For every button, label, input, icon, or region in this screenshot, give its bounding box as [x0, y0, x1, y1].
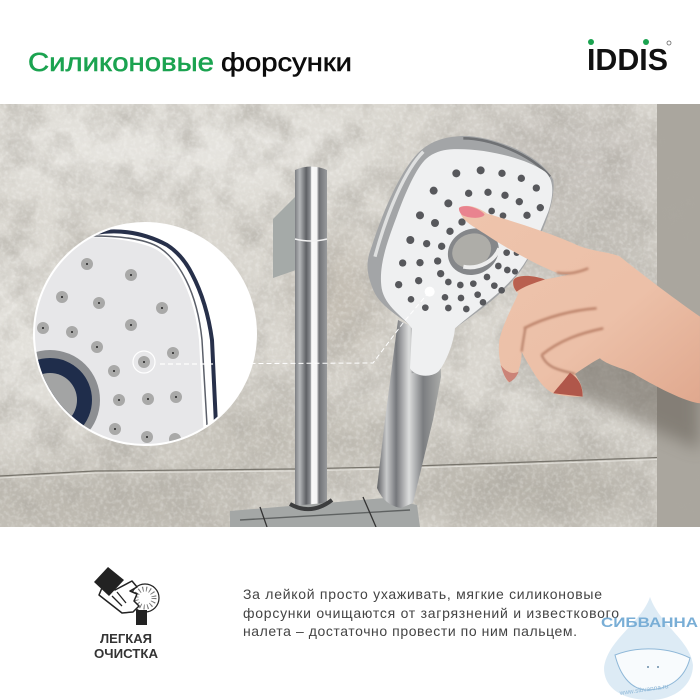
slider clamp [230, 497, 420, 527]
logo: IDDIS: IDDIS [587, 42, 668, 77]
fingernail: middle [513, 276, 545, 292]
chrome rim [367, 136, 554, 373]
white face [381, 149, 552, 376]
shower head [367, 136, 554, 376]
description text: форсунки очищаются от загрязнений и известкового [243, 605, 619, 621]
fingernail: ring [501, 365, 519, 382]
nozzles [395, 166, 544, 312]
stone wall [0, 104, 700, 540]
icon label: ЛЕГКАЯ [100, 631, 152, 646]
fingernail: little [553, 373, 583, 397]
hand [459, 206, 700, 403]
hand silhouette [459, 206, 700, 403]
watermark: Sibvanna [601, 597, 698, 700]
fingernail: index [459, 206, 485, 218]
icon label [94, 631, 159, 661]
lens base [33, 222, 257, 446]
highlighted nozzle ring [133, 351, 155, 373]
shower head icon [131, 584, 159, 612]
close-up nozzles [37, 258, 182, 445]
white marked nozzle [425, 287, 435, 297]
title: Силиконовые [28, 47, 214, 77]
button [448, 228, 499, 275]
title [28, 47, 352, 77]
chrome edge [95, 231, 216, 425]
panel: bathroom photo [0, 104, 700, 540]
description text: налета – достаточно провести по ним пальцем. [243, 623, 577, 639]
finger creases [524, 268, 603, 355]
hand shadow on wall [500, 330, 700, 450]
shower face close-up [35, 237, 204, 444]
title: форсунки [221, 47, 352, 77]
description text [243, 586, 619, 639]
hand icon [99, 581, 139, 613]
close-up button [36, 350, 100, 430]
cuff icon [94, 567, 124, 596]
description text: За лейкой просто ухаживать, мягкие силиконовые [243, 586, 602, 602]
icon label: ОЧИСТКА [94, 646, 159, 661]
icon: easy cleaning [94, 567, 159, 625]
dashed pointer line [253, 295, 426, 364]
magnifier circle [33, 222, 257, 446]
shower handle [377, 320, 441, 508]
watermark: Sibvanna: СИБВАННА [601, 615, 698, 630]
wall bracket [273, 196, 296, 278]
watermark: Sibvanna: www.sibvanna.ru [618, 683, 669, 697]
shower rail [295, 166, 327, 512]
